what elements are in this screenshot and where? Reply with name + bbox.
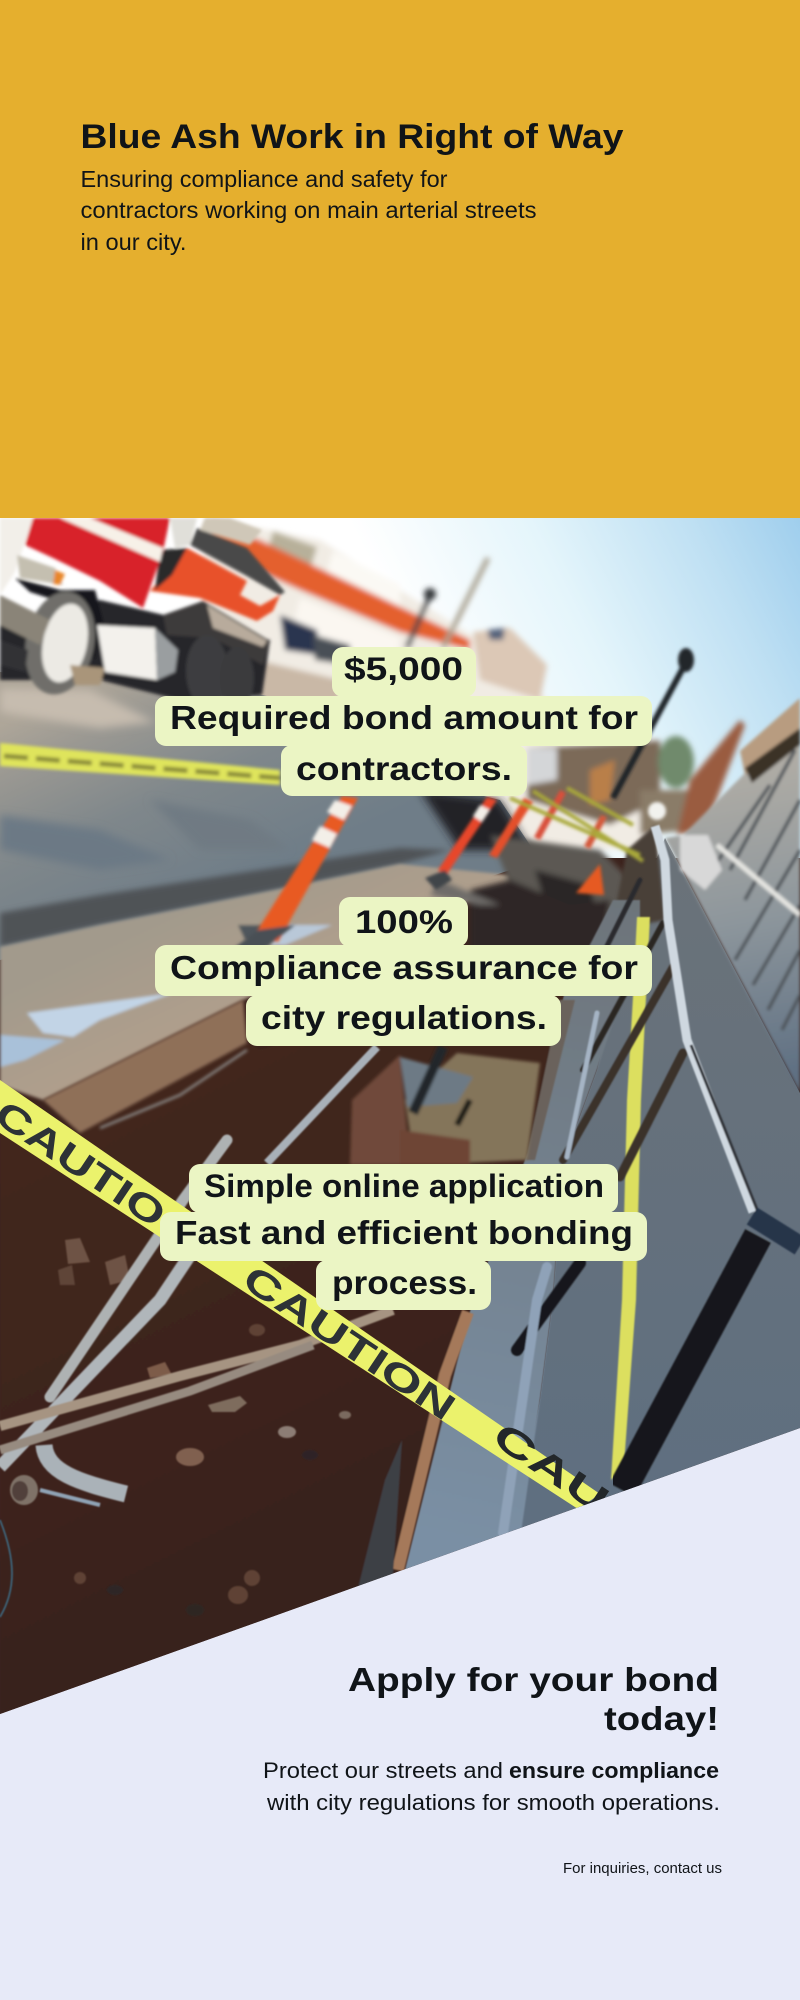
stat: online application xyxy=(160,1164,647,1310)
subtitle: contractors working on main arterial streets xyxy=(80,197,536,223)
call to action heading: today! xyxy=(604,1700,719,1737)
call to action description: ensure compliance xyxy=(509,1758,719,1783)
concrete curb face xyxy=(43,1000,247,1133)
near caution tape: CAU xyxy=(486,1415,616,1521)
background workers and vehicles xyxy=(527,740,660,825)
stat: compliance: city regulations. xyxy=(261,999,547,1036)
call to action heading: Apply for your bond xyxy=(348,1661,719,1698)
footer panel background xyxy=(0,518,800,2000)
trench dirt xyxy=(0,960,575,1730)
construction site photo illustration xyxy=(0,518,800,1730)
far lamp posts xyxy=(407,595,430,648)
yellow vertical tape xyxy=(611,917,650,1480)
truck rear body xyxy=(163,601,270,665)
sky xyxy=(0,518,800,858)
storefronts on right xyxy=(648,698,800,1093)
call to action description: with city regulations for smooth operations. xyxy=(266,1790,720,1815)
subtitle: Ensuring compliance and safety for xyxy=(80,166,448,192)
sidewalk xyxy=(510,838,800,1560)
near caution tape: CAUTION xyxy=(236,1258,463,1428)
rubble pile and utility box xyxy=(350,1047,540,1165)
distant street and buildings xyxy=(200,518,745,850)
truck xyxy=(0,518,285,709)
road light and shadow patches xyxy=(0,688,530,870)
photo base xyxy=(0,858,800,1714)
stat: bond amount xyxy=(155,647,652,796)
stat: compliance: 100% xyxy=(355,904,453,940)
rocks in dirt xyxy=(58,1238,351,1616)
stat: bond amount: Required bond amount for xyxy=(170,699,638,736)
distant yellow tapes xyxy=(0,743,643,861)
truck fuel tank xyxy=(97,625,157,680)
concrete slab xyxy=(0,864,520,1100)
truck front wheel xyxy=(23,590,97,696)
call to action description xyxy=(263,1758,720,1815)
main railing xyxy=(622,826,800,1490)
truck fender xyxy=(15,578,103,660)
stat: online application: process. xyxy=(332,1264,477,1301)
subtitle: in our city. xyxy=(80,229,186,255)
near caution tape xyxy=(0,1080,616,1521)
title: Blue Ash Work in Right of Way xyxy=(80,118,624,156)
truck rear wheels xyxy=(186,636,226,696)
stat: online application: Fast and efficient bonding xyxy=(175,1214,633,1251)
lamp post near xyxy=(613,648,694,798)
contact note: For inquiries, contact us xyxy=(563,1861,722,1877)
road surface xyxy=(0,672,540,960)
concrete curb xyxy=(400,900,640,1590)
truck orange body xyxy=(150,548,280,621)
truck exhaust xyxy=(155,548,187,590)
truck white pillar xyxy=(0,518,33,595)
truck dark underbody xyxy=(0,600,270,700)
brown fence zone xyxy=(612,825,665,925)
far trench and concrete xyxy=(429,833,623,945)
stat: compliance xyxy=(155,897,652,1046)
stat: bond amount: contractors. xyxy=(296,750,512,787)
stat: online application: Simple online application xyxy=(204,1168,604,1204)
truck headlights xyxy=(17,555,63,585)
conduit pipes xyxy=(0,1047,393,1617)
railing posts and lower rail xyxy=(503,880,683,1533)
stat: bond amount: $5,000 xyxy=(344,651,463,687)
call to action description: Protect our streets and xyxy=(263,1758,503,1783)
truck bumper xyxy=(0,595,50,645)
stat: compliance: Compliance assurance for xyxy=(170,949,638,986)
dark asphalt strip xyxy=(0,848,450,947)
call to action heading xyxy=(348,1661,719,1737)
orange traffic poles xyxy=(234,790,607,950)
header panel xyxy=(0,0,800,518)
truck red cab xyxy=(25,518,170,608)
subtitle xyxy=(80,166,536,255)
